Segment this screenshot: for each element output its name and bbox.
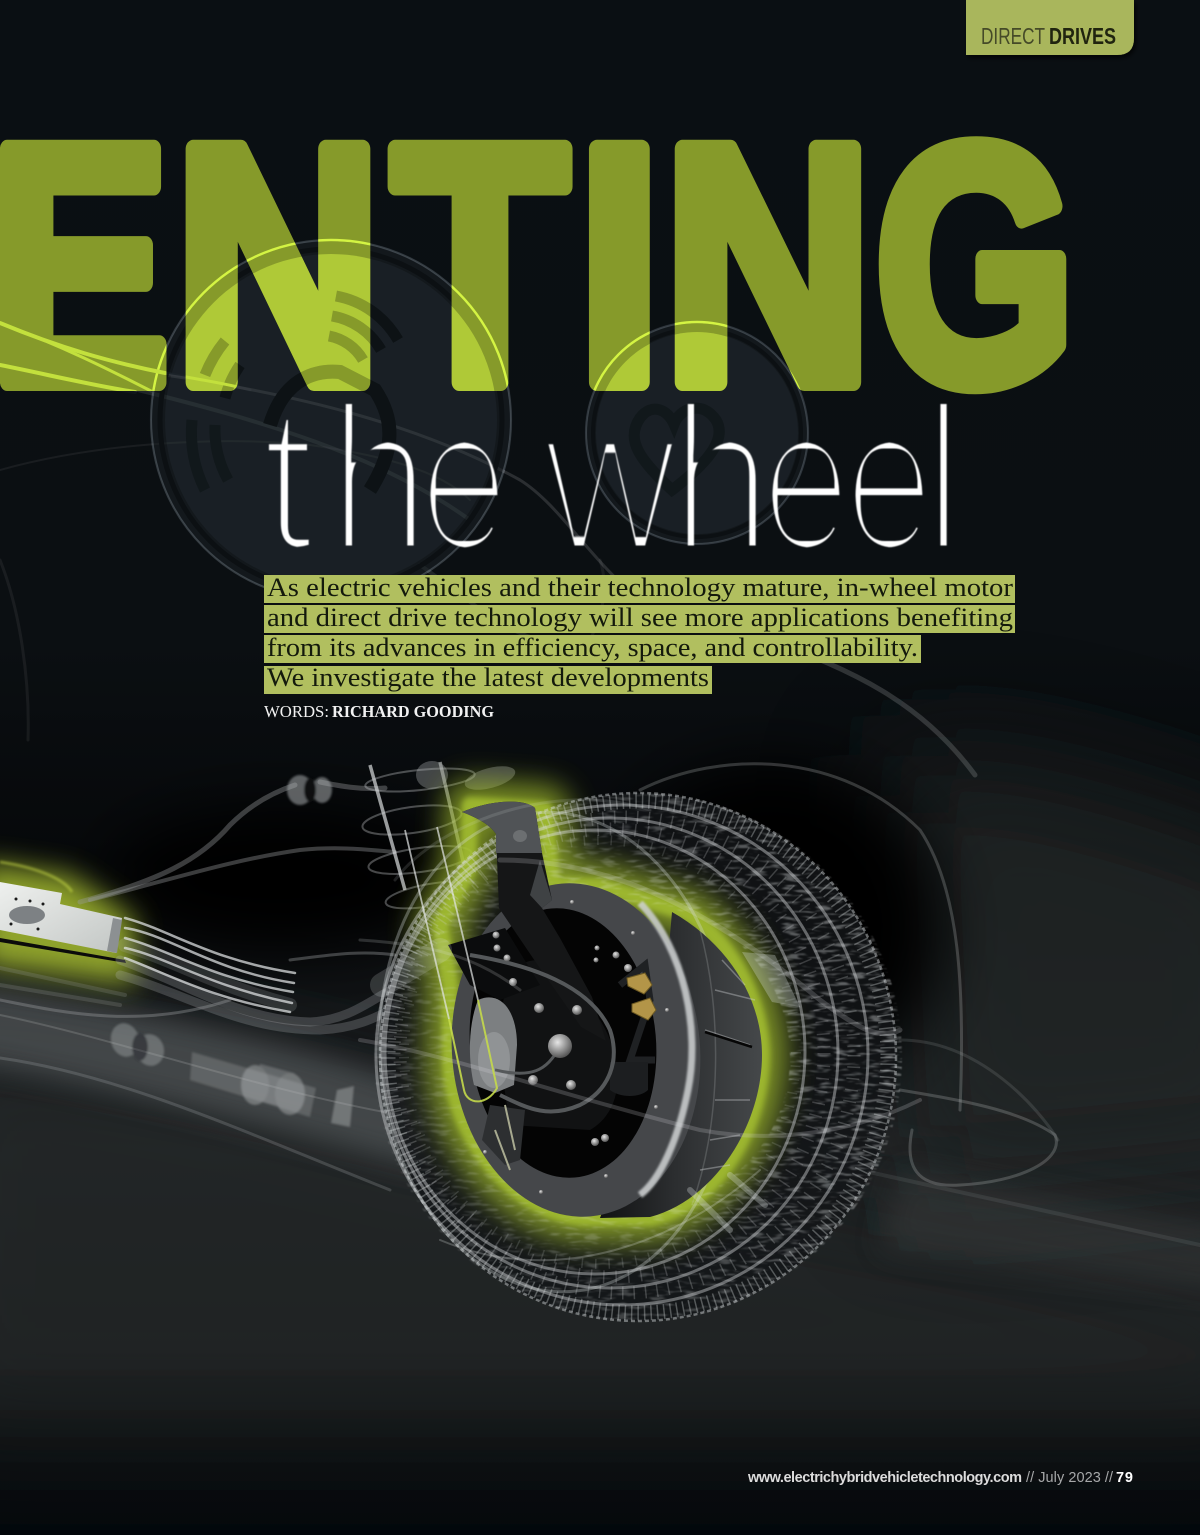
brake hose — [470, 955, 614, 1112]
motor cylinder — [600, 912, 762, 1218]
byline: RICHARD GOODING — [332, 702, 494, 721]
standfirst highlighted text block: As electric vehicles and their technology mature, in-wheel motor — [267, 573, 1013, 602]
headline: ENTING: G — [875, 75, 1075, 454]
subtitle: the wheel: h — [670, 364, 773, 593]
headline: ENTING — [0, 75, 1075, 455]
footer: web address, date and page number: // July 2023 // — [1026, 1470, 1114, 1486]
subtitle: the wheel: e — [844, 365, 935, 593]
footer: web address, date and page number: www.electrichybridvehicletechnology.com — [747, 1470, 1022, 1486]
illustration: tyre reflective panel — [742, 952, 800, 1007]
illustration: ghosted driveshaft components — [107, 775, 354, 1127]
section tab: direct drives — [966, 0, 1134, 55]
standfirst highlighted text block — [264, 573, 1015, 694]
illustration: green glow around hub — [440, 805, 762, 1218]
lower suspension link details — [482, 1105, 525, 1165]
ghost wheel icons behind headline — [151, 240, 808, 600]
byline: WORDS: — [264, 702, 329, 721]
headline: ENTING: N — [663, 75, 873, 454]
headline: ENTING: I — [576, 76, 662, 454]
subtitle: the wheel — [261, 364, 964, 593]
illustration: coil spring strut — [361, 761, 518, 914]
bolts — [483, 900, 669, 1194]
illustration: cable bundle from inverter — [0, 782, 400, 1190]
subtitle: the wheel: h — [328, 364, 431, 593]
subtitle: the wheel: e — [418, 365, 510, 593]
caliper block — [470, 997, 517, 1093]
illustration: guide loop — [405, 827, 497, 1101]
byline — [264, 702, 494, 721]
illustration: inverter unit with green glow — [0, 862, 135, 985]
standfirst highlighted text block: and direct drive technology will see more applications benefiting — [267, 603, 1013, 632]
illustration: tyre base — [380, 793, 896, 1321]
footer: web address, date and page number: 79 — [1116, 1470, 1133, 1486]
illustration: tyre tread — [364, 793, 896, 1321]
subtitle: the wheel: t — [261, 364, 315, 593]
standfirst highlighted text block: We investigate the latest developments — [267, 663, 709, 692]
front ring — [438, 873, 714, 1227]
subtitle: the wheel: w — [541, 364, 679, 593]
background: road and car body haze — [0, 754, 1200, 1450]
ghost wheel highlight on headline letters — [0, 240, 808, 600]
section tab: direct drives: DRIVES — [1049, 23, 1116, 49]
faint car outline lines in upper background — [0, 375, 1200, 1245]
motor interior — [500, 960, 618, 1130]
subtitle: the wheel: l — [923, 364, 964, 593]
standfirst highlighted text block: from its advances in efficiency, space, and controllability. — [267, 633, 918, 662]
strut arm — [462, 802, 606, 1041]
subtitle: the wheel: e — [760, 365, 852, 593]
illustration: tyre ghost sweeps over hub — [360, 800, 920, 1260]
brass fittings — [627, 973, 656, 1020]
illustration: hub motor — [438, 802, 762, 1227]
section tab: direct drives: DIRECT — [981, 23, 1045, 49]
headline: ENTING: N — [174, 75, 382, 454]
headline: ENTING: T — [392, 75, 568, 454]
